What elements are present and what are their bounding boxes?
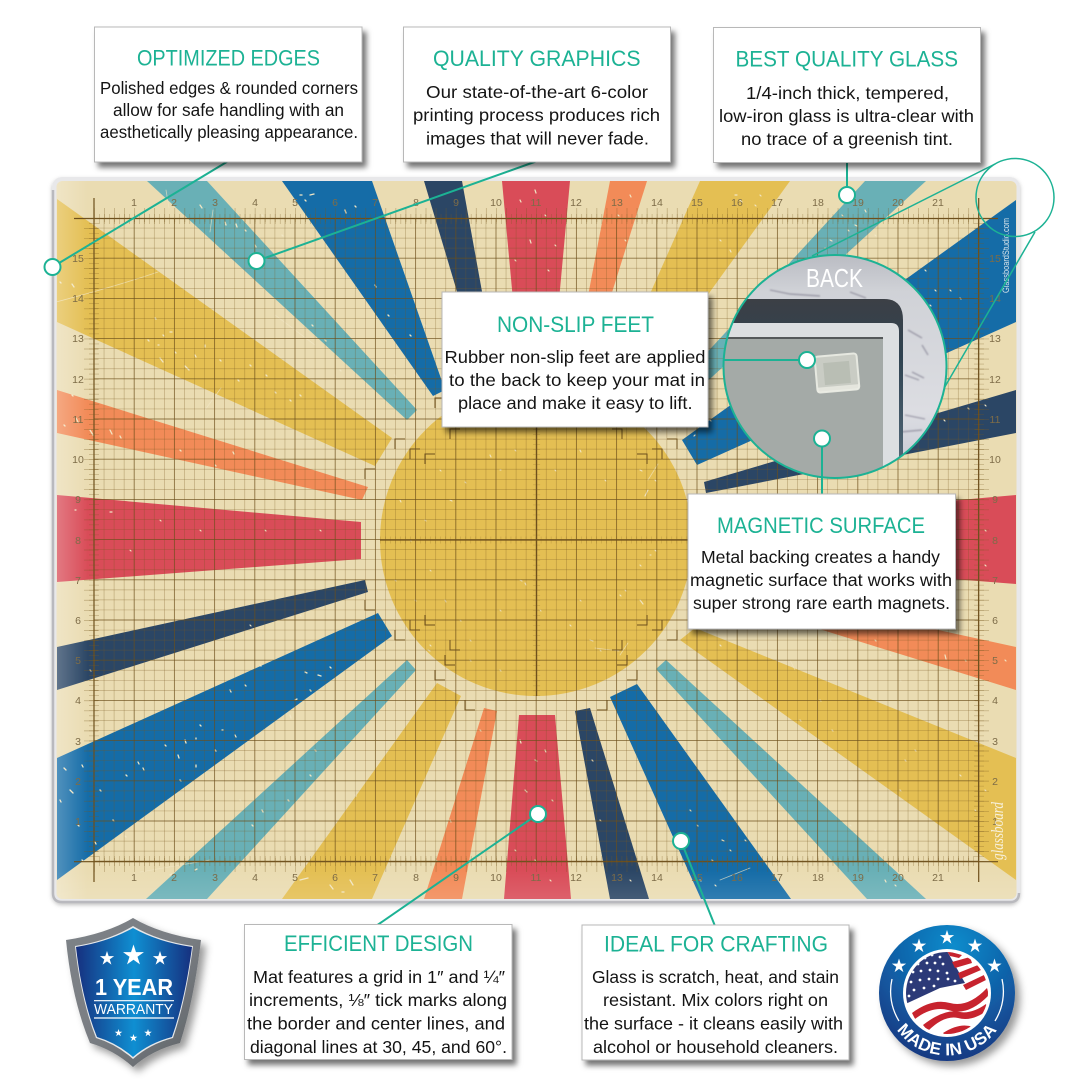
ruler numbers: bottom: 7 xyxy=(372,872,378,884)
ruler numbers: top: 1 xyxy=(131,197,137,209)
badge: made in USA xyxy=(879,925,1025,1071)
badge: 1 year warranty xyxy=(66,918,201,1067)
ruler numbers: right: 10 xyxy=(989,454,1001,466)
gray felt backing xyxy=(724,339,883,477)
callout: magnetic surface: MAGNETIC SURFACE xyxy=(717,513,925,538)
ruler numbers: right: 12 xyxy=(989,374,1001,386)
sun xyxy=(380,416,688,696)
script logo: glassboard xyxy=(988,802,1007,860)
ruler numbers: top: 13 xyxy=(611,197,623,209)
callout: optimized edges xyxy=(94,27,362,162)
callout: efficient design: increments, ⅛″ tick marks along xyxy=(249,990,507,1010)
callout: quality graphics: QUALITY GRAPHICS xyxy=(433,46,640,71)
ruler numbers: top: 18 xyxy=(812,197,824,209)
ruler numbers: left: 11 xyxy=(73,414,84,426)
callout: efficient design xyxy=(244,924,512,1060)
ruler numbers: top: 17 xyxy=(771,197,783,209)
white frame xyxy=(728,323,899,466)
callout: efficient design: EFFICIENT DESIGN xyxy=(284,931,473,956)
ruler numbers: left: 12 xyxy=(72,374,84,386)
diagonal corner brackets xyxy=(365,398,677,710)
ruler numbers: bottom: 11 xyxy=(531,872,542,884)
callout: best quality glass: 1/4-inch thick, tempered, xyxy=(746,83,949,103)
ruler numbers: left: 9 xyxy=(75,494,81,506)
badge: 1 year warranty: WARRANTY xyxy=(94,1002,173,1018)
callout: best quality glass: BEST QUALITY GLASS xyxy=(736,46,958,72)
ruler numbers: bottom: 13 xyxy=(611,872,623,884)
ruler numbers: left xyxy=(72,253,84,828)
ruler numbers: right: 11 xyxy=(990,414,1001,426)
callout: best quality glass: no trace of a greenish tint. xyxy=(741,129,953,149)
callout: best quality glass: low-iron glass is ultra-clear with xyxy=(719,106,974,126)
dark glass edge xyxy=(734,299,903,456)
ruler numbers: bottom: 19 xyxy=(852,872,864,884)
panel: glass mat xyxy=(52,177,1020,903)
connectors xyxy=(52,160,847,926)
callout: optimized edges: aesthetically pleasing appearance. xyxy=(100,122,358,142)
zoom lines to corner xyxy=(812,158,1054,390)
ruler numbers: top: 6 xyxy=(332,197,338,209)
ruler numbers: bottom xyxy=(132,874,944,881)
eighth and quarter tick marks xyxy=(91,215,982,865)
ruler numbers: bottom: 21 xyxy=(932,872,944,884)
ruler numbers: right: 6 xyxy=(992,615,998,627)
ruler numbers: top: 20 xyxy=(892,197,904,209)
ruler numbers: bottom: 4 xyxy=(252,872,258,884)
callout: ideal for crafting: resistant. Mix colors right on xyxy=(603,990,828,1010)
ruler numbers: left: 14 xyxy=(72,293,84,305)
ruler numbers: left: 4 xyxy=(75,695,81,707)
ruler numbers: top: 7 xyxy=(372,197,378,209)
rays xyxy=(57,181,1016,899)
callout: efficient design: Mat features a grid in 1″ and ¼″ xyxy=(253,967,505,987)
ruler numbers: right: 2 xyxy=(992,776,998,788)
ruler numbers: bottom: 6 xyxy=(332,872,338,884)
ruler numbers: bottom: 14 xyxy=(651,872,663,884)
corner zoom circle xyxy=(976,158,1054,236)
callout: non-slip feet xyxy=(442,292,708,427)
american flag xyxy=(906,952,988,1034)
glass edge highlights xyxy=(56,181,84,899)
callout: quality graphics: printing process produces rich xyxy=(413,105,660,125)
ruler numbers: top: 8 xyxy=(413,197,419,209)
border lines xyxy=(74,198,998,882)
callout: non-slip feet: place and make it easy to lift. xyxy=(458,393,692,413)
badge: 1 year warranty: 1 YEAR xyxy=(95,974,173,1000)
callout: best quality glass xyxy=(714,28,980,162)
website watermark: GlassboardStudio.com xyxy=(1001,218,1012,293)
ruler numbers: left: 3 xyxy=(75,736,81,748)
ruler numbers: right: 7 xyxy=(992,575,998,587)
ruler numbers: right: 5 xyxy=(992,655,998,667)
ruler numbers: top: 11 xyxy=(531,197,542,209)
ruler numbers: bottom: 20 xyxy=(892,872,904,884)
ruler numbers: right: 8 xyxy=(992,535,998,547)
callout: non-slip feet: to the back to keep your mat in xyxy=(449,370,705,390)
ruler numbers: bottom: 18 xyxy=(812,872,824,884)
ruler numbers: bottom: 9 xyxy=(453,872,459,884)
ruler numbers: left: 13 xyxy=(72,333,84,345)
ruler numbers: top: 10 xyxy=(490,197,502,209)
ruler numbers: left: 5 xyxy=(75,655,81,667)
callout: optimized edges: allow for safe handling with an xyxy=(113,100,344,120)
ruler numbers: right xyxy=(989,253,1001,828)
ruler numbers: top: 19 xyxy=(852,197,864,209)
ruler numbers: top: 21 xyxy=(932,197,944,209)
ruler numbers: left: 7 xyxy=(75,575,81,587)
ruled grid xyxy=(74,198,998,882)
callout: ideal for crafting: IDEAL FOR CRAFTING xyxy=(604,932,828,956)
ruler numbers: top: 12 xyxy=(570,197,582,209)
ruler numbers: bottom: 15 xyxy=(691,872,703,884)
callout: optimized edges: Polished edges & rounded corners xyxy=(100,78,358,98)
ruler numbers: left: 10 xyxy=(72,454,84,466)
callout: magnetic surface: magnetic surface that works with xyxy=(690,570,952,590)
distressed specks and scratches xyxy=(56,190,1006,892)
rubber foot xyxy=(815,353,859,393)
ruler numbers: bottom: 8 xyxy=(413,872,419,884)
ruler numbers: top: 2 xyxy=(171,197,177,209)
back label: BACK xyxy=(806,263,864,293)
callout: non-slip feet: Rubber non-slip feet are applied xyxy=(444,347,706,367)
callout: quality graphics xyxy=(404,27,670,162)
ruler numbers: bottom: 3 xyxy=(212,872,218,884)
made in usa text: MADE IN USA xyxy=(897,1022,997,1056)
ruler numbers: top: 4 xyxy=(252,197,258,209)
mat artwork: sunburst xyxy=(56,181,1018,900)
callout: efficient design: the border and center lines, and xyxy=(247,1014,505,1034)
callout: magnetic surface: Metal backing creates a handy xyxy=(701,547,940,567)
ruler numbers: top: 16 xyxy=(731,197,743,209)
ruler numbers: top: 15 xyxy=(691,197,703,209)
ruler numbers: left: 6 xyxy=(75,615,81,627)
ruler numbers: left: 2 xyxy=(75,776,81,788)
ruler numbers: top: 9 xyxy=(453,197,459,209)
ruler numbers: right: 13 xyxy=(989,333,1001,345)
ruler numbers: left: 8 xyxy=(75,535,81,547)
callout: quality graphics: Our state-of-the-art 6-color xyxy=(426,82,648,102)
ruler numbers: bottom: 1 xyxy=(131,872,137,884)
ruler numbers: left: 15 xyxy=(72,253,84,265)
ruler numbers: top xyxy=(132,199,944,206)
glass bezel xyxy=(52,177,1020,903)
callout: magnetic surface: super strong rare earth magnets. xyxy=(693,593,950,613)
ruler numbers: top: 14 xyxy=(651,197,663,209)
ruler numbers: right: 14 xyxy=(989,293,1001,305)
callout: ideal for crafting: Glass is scratch, heat, and stain xyxy=(592,967,839,987)
connector dots xyxy=(44,187,855,849)
ruler numbers: bottom: 5 xyxy=(292,872,298,884)
callout: quality graphics: images that will never fade. xyxy=(426,128,649,148)
callout: efficient design: diagonal lines at 30, 45, and 60°. xyxy=(250,1037,507,1057)
ruler numbers: left: 1 xyxy=(75,816,81,828)
callout: non-slip feet: NON-SLIP FEET xyxy=(497,312,654,337)
ruler numbers: right: 15 xyxy=(989,253,1001,265)
ruler numbers: right: 4 xyxy=(992,695,998,707)
ruler numbers: bottom: 12 xyxy=(570,872,582,884)
callout: ideal for crafting: alcohol or household cleaners. xyxy=(593,1037,838,1057)
ruler numbers: right: 3 xyxy=(992,736,998,748)
callout: optimized edges: OPTIMIZED EDGES xyxy=(137,46,320,70)
callout: ideal for crafting: the surface - it cleans easily with xyxy=(584,1014,843,1034)
ruler numbers: right: 1 xyxy=(992,816,998,828)
ruler numbers: top: 3 xyxy=(212,197,218,209)
ruler numbers: bottom: 10 xyxy=(490,872,502,884)
ruler numbers: top: 5 xyxy=(292,197,298,209)
magnifier: back of the mat xyxy=(722,254,948,479)
ruler numbers: bottom: 17 xyxy=(771,872,783,884)
ruler numbers: bottom: 16 xyxy=(731,872,743,884)
ruler numbers: bottom: 2 xyxy=(171,872,177,884)
callout: ideal for crafting xyxy=(582,925,849,1060)
ruler numbers: right: 9 xyxy=(992,494,998,506)
callout: magnetic surface xyxy=(688,494,956,629)
